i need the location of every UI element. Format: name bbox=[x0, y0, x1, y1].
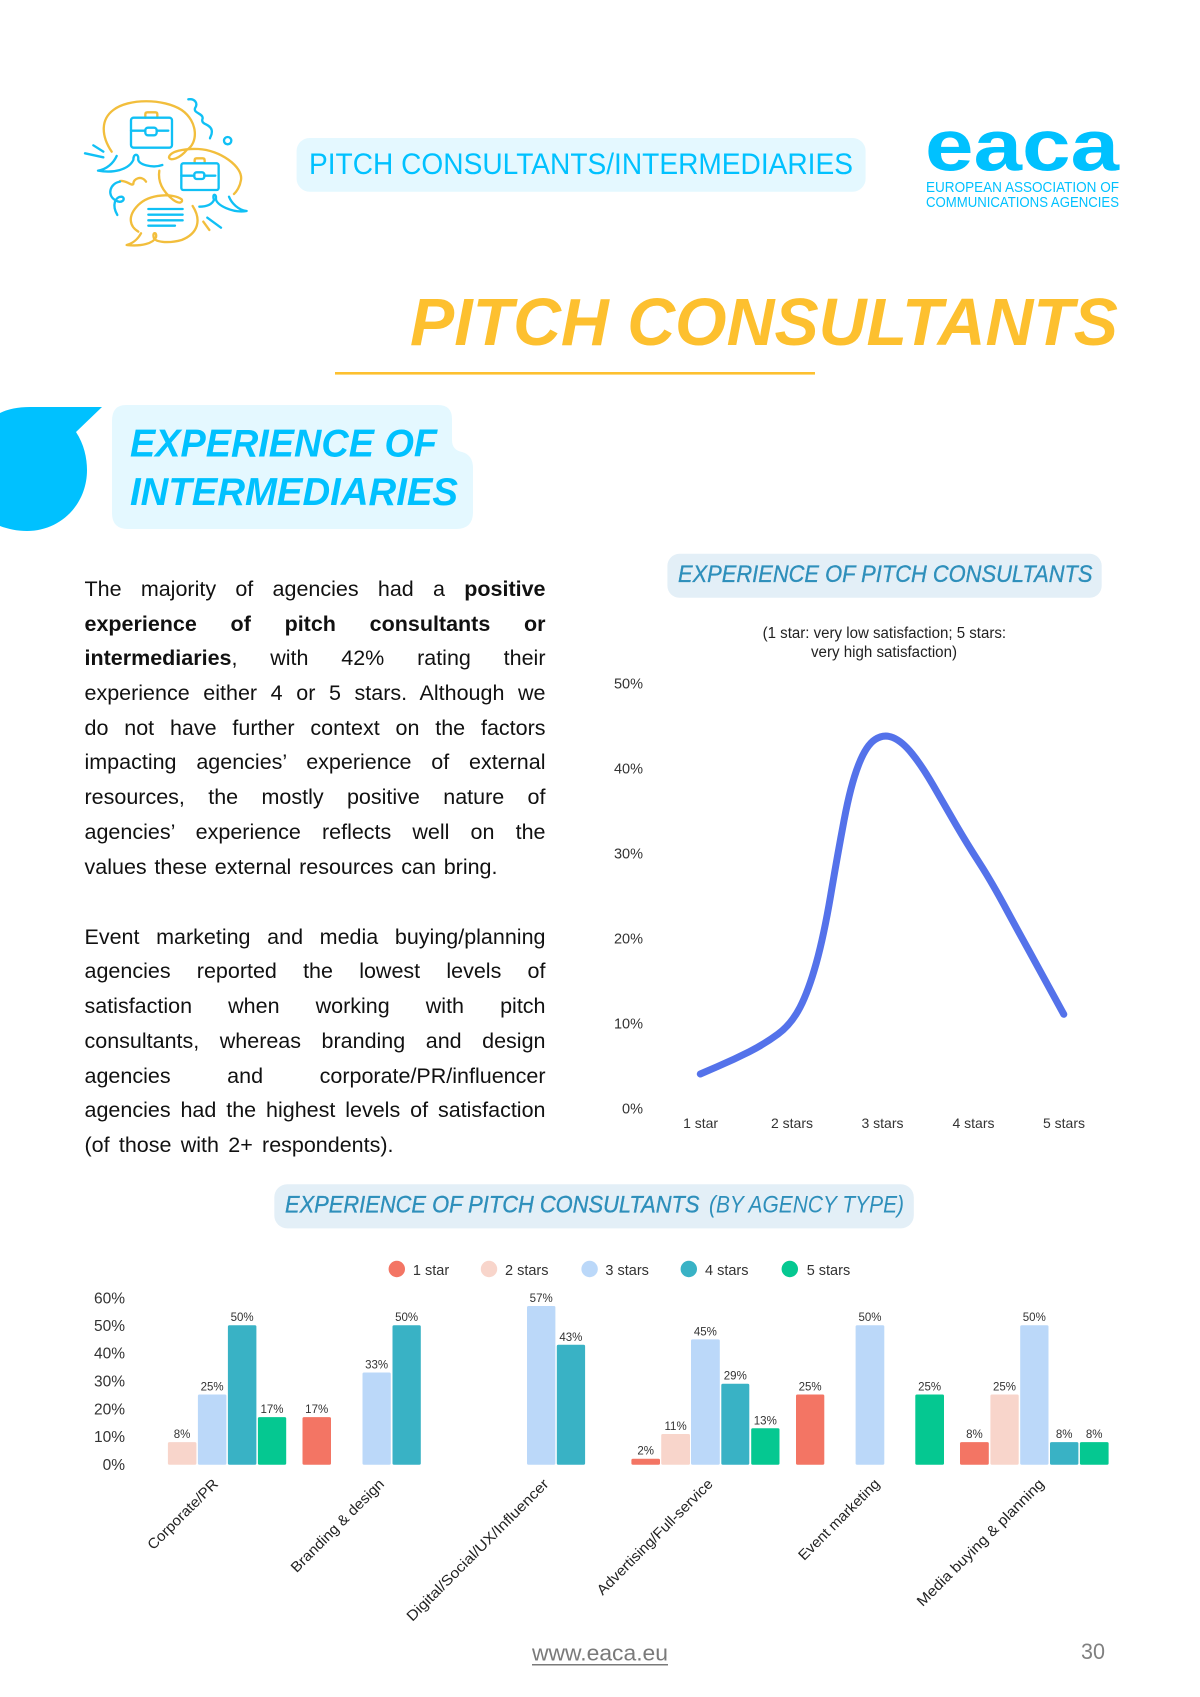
decorative speech blob bbox=[0, 407, 102, 531]
bars: Media buying & planning: 50% bbox=[1023, 1312, 1046, 1324]
x axis labels: 1 star bbox=[683, 1115, 718, 1131]
body text: consultants, whereas branding and design bbox=[84, 1029, 546, 1053]
bars: Media buying & planning bbox=[960, 1312, 1109, 1465]
body text: experience either 4 or 5 stars. Although we bbox=[84, 681, 546, 705]
y axis labels bbox=[94, 1290, 125, 1474]
data line bbox=[700, 736, 1064, 1074]
category labels: Media buying & planning bbox=[914, 1476, 1048, 1610]
icon: speech bubbles with briefcases bbox=[85, 99, 247, 245]
category labels: Digital/Social/UX/Influencer bbox=[404, 1476, 552, 1625]
legend: star ratings: 2 stars bbox=[505, 1263, 549, 1279]
bars: Corporate/PR: 50% bbox=[231, 1312, 254, 1324]
bars: Event marketing: 25% bbox=[799, 1381, 822, 1393]
body text: impacting agencies’ experience of external bbox=[84, 750, 546, 774]
x axis labels bbox=[683, 1115, 1085, 1131]
y axis labels: 40% bbox=[94, 1346, 125, 1363]
bars: Media buying & planning: 8% bbox=[1086, 1429, 1103, 1441]
logo: EACA: COMMUNICATIONS AGENCIES bbox=[926, 194, 1119, 211]
bars: Corporate/PR: 17% bbox=[260, 1404, 284, 1416]
body text: intermediaries, with 42% rating their bbox=[84, 646, 546, 670]
legend: star ratings bbox=[389, 1261, 850, 1279]
y axis labels: 10% bbox=[94, 1429, 125, 1446]
chart note: star scale bbox=[763, 625, 1006, 661]
bars: Advertising/Full-service: 2% bbox=[637, 1446, 654, 1458]
y axis labels: 0% bbox=[622, 1102, 643, 1118]
body text: The majority of agencies had a positive bbox=[84, 577, 546, 601]
header tag: section name: PITCH CONSULTANTS/INTERMEDIARIES bbox=[309, 148, 853, 181]
category labels: Corporate/PR bbox=[145, 1476, 222, 1553]
bars: Digital/Social/UX/Influencer: 43% bbox=[559, 1332, 582, 1344]
bars: Event marketing bbox=[796, 1312, 944, 1465]
body text: experience of pitch consultants or bbox=[84, 612, 546, 636]
chart note: star scale: (1 star: very low satisfaction; 5 stars: bbox=[763, 625, 1006, 642]
body text: do not have further context on the factors bbox=[84, 716, 546, 740]
y axis labels: 50% bbox=[94, 1318, 125, 1335]
logo: EACA: eaca bbox=[925, 106, 1120, 186]
body text: agencies reported the lowest levels of bbox=[84, 959, 546, 983]
chart heading: by agency type: EXPERIENCE OF PITCH CONSULTANTS bbox=[285, 1192, 700, 1218]
bar chart: experience by agency type bbox=[94, 1290, 1109, 1625]
y axis labels bbox=[614, 677, 643, 1118]
body text: satisfaction when working with pitch bbox=[84, 994, 546, 1018]
body text: values these external resources can bring. bbox=[84, 854, 498, 878]
section heading: experience of intermediaries: INTERMEDIARIES bbox=[130, 471, 458, 514]
body text: resources, the mostly positive nature of bbox=[84, 785, 546, 809]
legend: star ratings: 4 stars bbox=[705, 1263, 749, 1279]
body text: agencies’ experience reflects well on the bbox=[84, 820, 546, 844]
bars: Event marketing: 25% bbox=[918, 1381, 941, 1393]
category labels: Advertising/Full-service bbox=[594, 1476, 717, 1599]
y axis labels: 30% bbox=[94, 1374, 125, 1391]
category labels: Branding & design bbox=[288, 1476, 388, 1576]
section heading: experience of intermediaries: EXPERIENCE OF bbox=[130, 422, 438, 466]
title: PITCH CONSULTANTS bbox=[410, 285, 1118, 360]
body text: agencies and corporate/PR/influencer bbox=[84, 1064, 546, 1088]
bars: Media buying & planning: 25% bbox=[993, 1381, 1016, 1393]
logo: EACA: EUROPEAN ASSOCIATION OF bbox=[926, 179, 1119, 196]
bars: Corporate/PR: 25% bbox=[201, 1381, 224, 1393]
header tag: section name bbox=[297, 138, 866, 192]
y axis labels: 30% bbox=[614, 847, 643, 863]
chart heading: experience of pitch consultants bbox=[667, 554, 1102, 598]
bars: Media buying & planning: 8% bbox=[1056, 1429, 1073, 1441]
legend: star ratings: 3 stars bbox=[605, 1263, 649, 1279]
bars: Event marketing: 50% bbox=[858, 1312, 882, 1324]
bars: Digital/Social/UX/Influencer: 57% bbox=[530, 1293, 553, 1305]
body text: (of those with 2+ respondents). bbox=[84, 1133, 394, 1157]
x axis labels: 2 stars bbox=[771, 1115, 813, 1131]
x axis labels: 4 stars bbox=[952, 1115, 995, 1131]
bars: Advertising/Full-service: 11% bbox=[665, 1421, 687, 1433]
y axis labels: 20% bbox=[94, 1401, 125, 1418]
chart heading: by agency type: (BY AGENCY TYPE) bbox=[709, 1192, 904, 1218]
line chart: satisfaction distribution bbox=[614, 677, 1085, 1131]
y axis labels: 50% bbox=[614, 677, 643, 693]
bars: Branding & design: 33% bbox=[365, 1359, 388, 1371]
page number: 30 bbox=[1081, 1639, 1105, 1664]
logo: EACA bbox=[925, 106, 1120, 211]
body text: Event marketing and media buying/planning bbox=[84, 925, 546, 949]
bars: Media buying & planning: 8% bbox=[966, 1429, 983, 1441]
y axis labels: 0% bbox=[103, 1457, 125, 1474]
bars: Branding & design bbox=[302, 1312, 421, 1465]
x axis labels: 5 stars bbox=[1043, 1115, 1085, 1131]
bars: Advertising/Full-service: 13% bbox=[754, 1415, 777, 1427]
chart heading: experience of pitch consultants: EXPERIENCE OF PITCH CONSULTANTS bbox=[678, 561, 1092, 588]
legend: star ratings: 5 stars bbox=[807, 1263, 850, 1279]
chart heading: by agency type bbox=[274, 1184, 914, 1228]
y axis labels: 20% bbox=[614, 932, 643, 948]
x axis labels: 3 stars bbox=[861, 1115, 904, 1131]
bars: Advertising/Full-service: 45% bbox=[694, 1326, 717, 1338]
bars: Corporate/PR bbox=[168, 1312, 286, 1465]
body text: agencies had the highest levels of satisfaction bbox=[84, 1098, 546, 1122]
footer link: www.eaca.eu bbox=[531, 1640, 668, 1666]
bars: Advertising/Full-service: 29% bbox=[724, 1371, 747, 1383]
y axis labels: 40% bbox=[614, 762, 643, 778]
bars: Branding & design: 50% bbox=[395, 1312, 418, 1324]
bars: Digital/Social/UX/Influencer bbox=[527, 1293, 585, 1465]
legend: star ratings: 1 star bbox=[413, 1263, 449, 1279]
category labels bbox=[145, 1476, 1048, 1625]
category labels: Event marketing bbox=[796, 1476, 883, 1564]
bars: Advertising/Full-service bbox=[631, 1326, 780, 1465]
body text bbox=[84, 577, 546, 1157]
chart note: star scale: very high satisfaction) bbox=[811, 644, 957, 661]
y axis labels: 10% bbox=[614, 1017, 643, 1033]
section heading: experience of intermediaries bbox=[112, 405, 473, 529]
bars: Corporate/PR: 8% bbox=[174, 1429, 190, 1441]
y axis labels: 60% bbox=[94, 1290, 125, 1307]
bars: Branding & design: 17% bbox=[305, 1404, 328, 1416]
